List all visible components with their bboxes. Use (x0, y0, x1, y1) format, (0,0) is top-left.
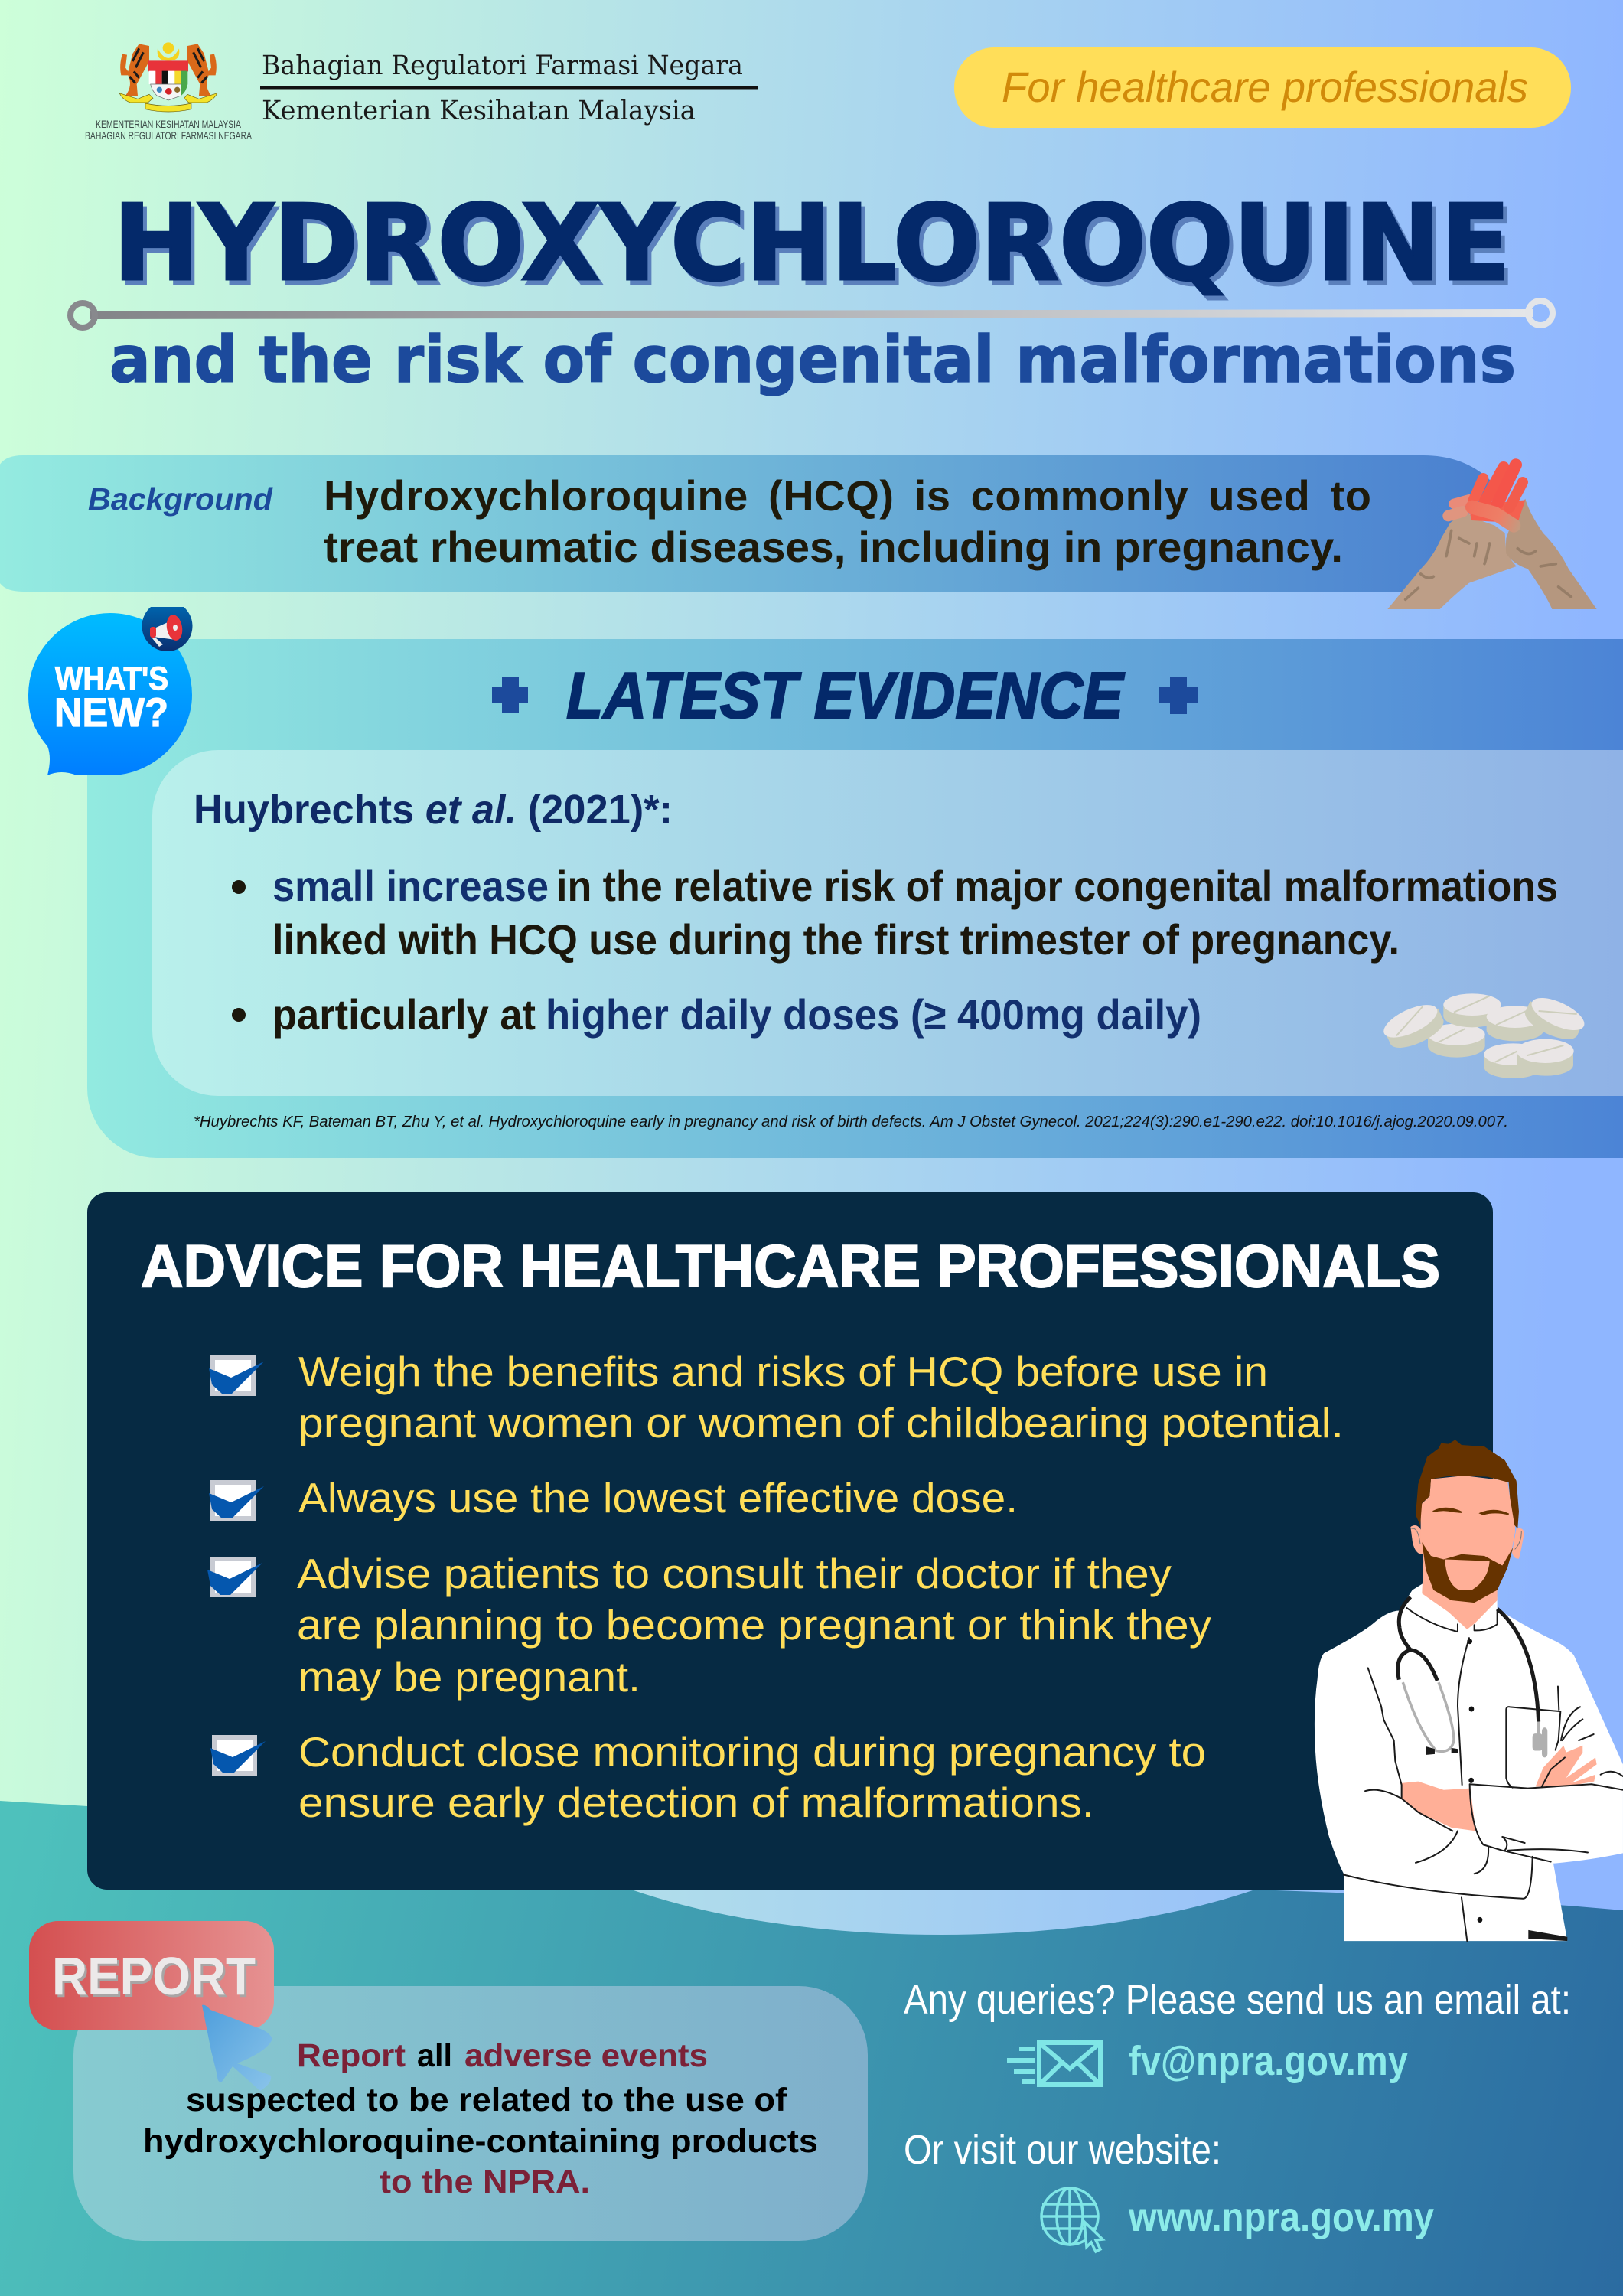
advice item 2: Always use the lowest effective dose. (298, 1474, 1018, 1521)
panel: advice (87, 1192, 1493, 1890)
advice item 3: Advise patients to consult their doctor if they (297, 1550, 1172, 1597)
advice item 3: are planning to become pregnant or think they (297, 1601, 1212, 1649)
background text: treat rheumatic diseases, including in pregnancy. (324, 523, 1343, 571)
logo caption (85, 119, 252, 142)
advice item 3: may be pregnant. (298, 1653, 640, 1701)
evidence bullets (232, 862, 1558, 1039)
panel: report (73, 1986, 868, 2241)
logo caption: BAHAGIAN REGULATORI FARMASI NEGARA (85, 130, 252, 142)
title: HYDROXYCHLOROQUINE (117, 188, 1514, 309)
department name (260, 51, 758, 126)
contact: website: Or visit our website: (904, 2127, 1221, 2173)
advice item 1 (209, 1348, 1344, 1446)
contact: website: www.npra.gov.my (1128, 2194, 1434, 2240)
background text (324, 471, 1371, 571)
icon: coat of arms (119, 42, 217, 112)
background text: Hydroxychloroquine (HCQ) is commonly used to (324, 471, 1371, 520)
advice item 1: Weigh the benefits and risks of HCQ before use in (298, 1348, 1268, 1395)
report text (143, 2037, 818, 2200)
icon: plus left (492, 677, 528, 713)
icon: tablets (1379, 990, 1589, 1078)
panel: latest evidence (87, 639, 1623, 1158)
footnote: *Huybrechts KF, Bateman BT, Zhu Y, et al. Hydroxychloroquine early in pregnancy and risk of birth defects. Am J Obstet Gynecol. 2021;224(3):290.e1-290.e22. doi:10.1016/j.ajog.2020.09.007. (194, 1114, 1508, 1130)
evidence bullets: linked with HCQ use during the first trimester of pregnancy. (272, 915, 1400, 964)
advice item 4: Conduct close monitoring during pregnancy to (298, 1728, 1206, 1776)
bubble text: WHAT'S (55, 660, 168, 697)
icon: cursor (202, 2005, 272, 2091)
department name: Bahagian Regulatori Farmasi Negara (262, 51, 743, 81)
report text: Report (297, 2037, 406, 2074)
advice item 1: pregnant women or women of childbearing potential. (298, 1399, 1344, 1446)
advice item 4 (210, 1728, 1206, 1826)
heading: latest evidence: LATEST EVIDENCE (566, 660, 1125, 732)
report text: adverse events (464, 2037, 708, 2074)
logo caption: KEMENTERIAN KESIHATAN MALAYSIA (96, 119, 241, 130)
contact: email: fv@npra.gov.my (1129, 2038, 1408, 2084)
background label: Background (88, 481, 273, 517)
bubble text (54, 660, 168, 735)
subtitle: and the risk of congenital malformations (109, 322, 1516, 397)
icon: what's new bubble (28, 607, 193, 775)
report button (29, 1921, 274, 2030)
department name: Kementerian Kesihatan Malaysia (262, 96, 696, 126)
report text: suspected to be related to the use of (186, 2082, 787, 2118)
icon: doctor illustration (1315, 1440, 1623, 1941)
panel: background (0, 455, 1492, 592)
audience pill (954, 47, 1571, 128)
icon: megaphone badge (142, 607, 193, 651)
icon: plus right (1159, 677, 1198, 714)
evidence bullets: higher daily doses (≥ 400mg daily) (546, 990, 1201, 1039)
audience pill: For healthcare professionals (1002, 63, 1528, 111)
advice item 4: ensure early detection of malformations. (298, 1779, 1094, 1826)
icon: globe (1041, 2188, 1103, 2252)
title rule (70, 301, 1553, 328)
report button: REPORT (54, 1949, 258, 2008)
contact: website (904, 2127, 1434, 2252)
evidence bullets: in the relative risk of major congenital malformations (556, 862, 1558, 910)
evidence bullets: particularly at (272, 990, 536, 1039)
bubble text: NEW? (54, 690, 168, 735)
contact: email (904, 1977, 1571, 2085)
study citation: Huybrechts et al. (2021)*: (194, 787, 673, 833)
report button: REPORT (52, 1946, 256, 2006)
ministry logo (85, 42, 252, 142)
heading: advice: ADVICE FOR HEALTHCARE PROFESSIONALS (141, 1232, 1440, 1300)
report text: all (417, 2037, 452, 2074)
title: HYDROXYCHLOROQUINE (113, 183, 1511, 305)
evidence inner card (152, 750, 1623, 1096)
report text: hydroxychloroquine-containing products (143, 2123, 818, 2160)
report text: to the NPRA. (380, 2164, 590, 2200)
icon: arthritic hands (1387, 465, 1597, 609)
advice item 3 (207, 1550, 1212, 1701)
bottom wave (0, 1801, 1623, 2296)
icon: envelope (1007, 2043, 1100, 2085)
evidence bullets: small increase (272, 862, 549, 910)
